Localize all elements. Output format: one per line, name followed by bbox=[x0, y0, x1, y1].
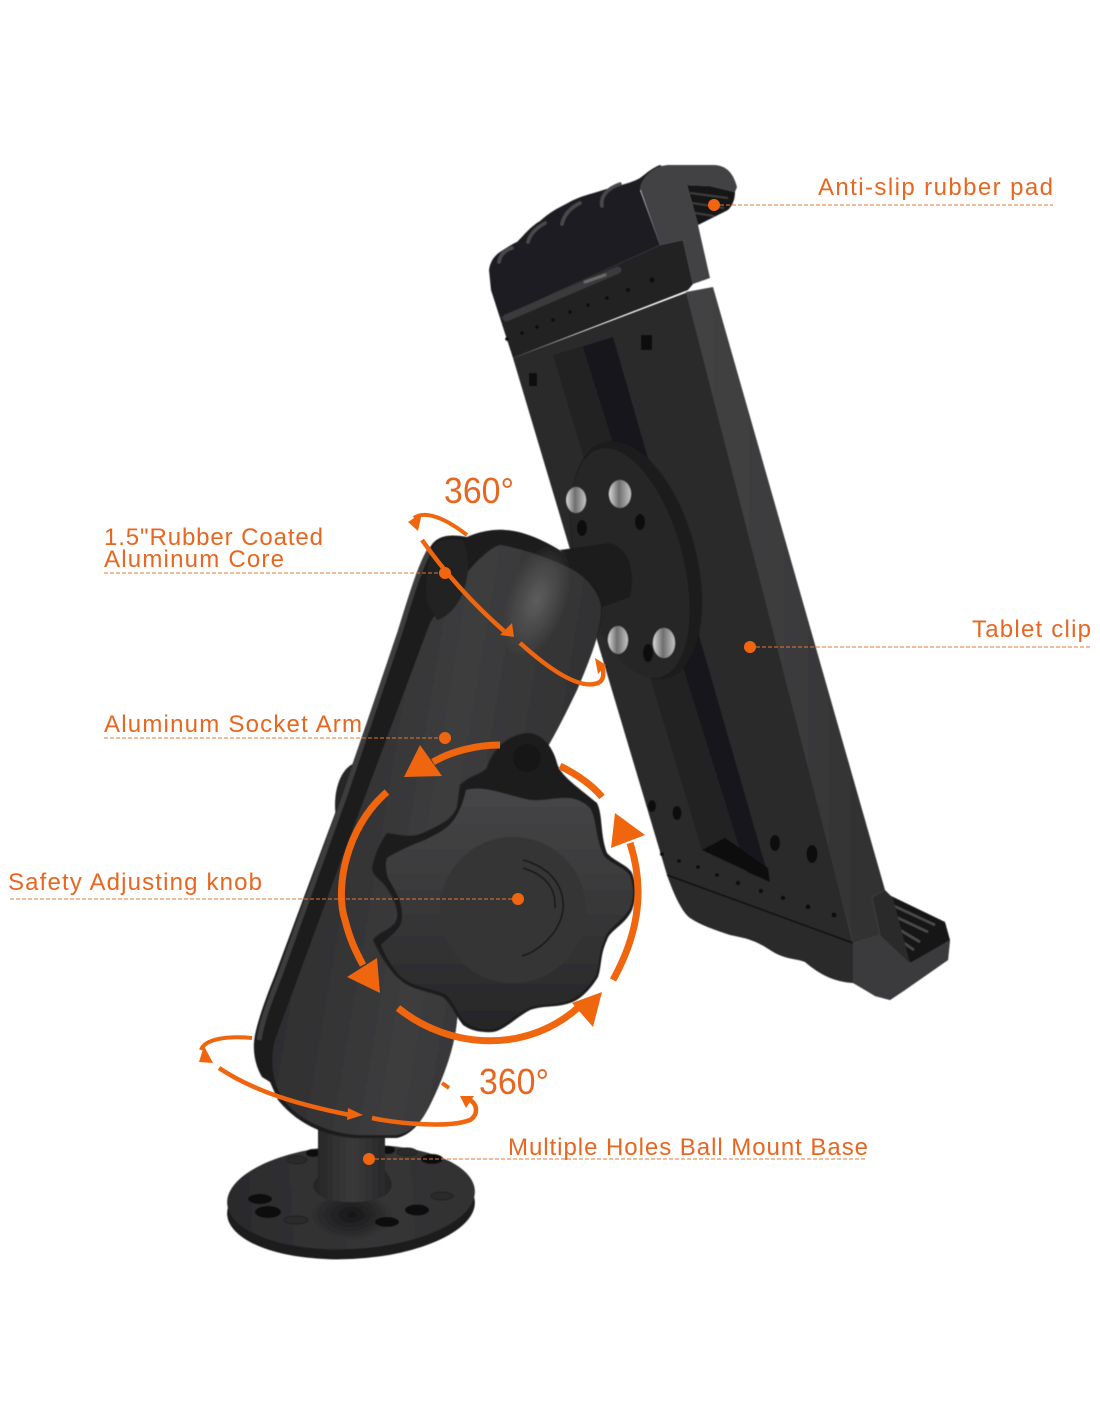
top socket bbox=[426, 539, 468, 620]
callout: multiple holes ball mount base: Multiple Holes Ball Mount Base bbox=[508, 1134, 868, 1161]
clip holes bbox=[529, 335, 836, 918]
callout: multiple holes ball mount base bbox=[363, 1134, 868, 1165]
back ball bbox=[335, 763, 381, 847]
post shadow bbox=[310, 1194, 394, 1246]
dotted strip bbox=[500, 240, 693, 358]
cap arrow mark bbox=[522, 860, 563, 956]
screws bbox=[566, 487, 586, 513]
callout: rubber coated aluminum core: Aluminum Core bbox=[104, 546, 284, 573]
tablet clip bbox=[489, 165, 950, 1000]
socket arm bbox=[254, 530, 602, 1138]
mounting plate bbox=[546, 427, 726, 693]
clip side rail bbox=[686, 287, 885, 943]
callout: aluminum socket arm: Aluminum Socket Arm bbox=[104, 711, 362, 738]
stem bbox=[560, 543, 632, 608]
safety adjusting knob bbox=[372, 733, 635, 1032]
clip front plate bbox=[513, 292, 853, 943]
knob face bbox=[381, 789, 633, 1029]
arm face bbox=[272, 545, 601, 1135]
flange highlight bbox=[259, 548, 431, 1040]
top rubber pad bbox=[687, 185, 735, 225]
grip ridges bbox=[499, 184, 620, 262]
base post bbox=[313, 1125, 392, 1202]
knob cap bbox=[440, 837, 586, 983]
callout: rubber coated aluminum core: 1.5"Rubber Coated bbox=[104, 524, 323, 551]
callout: anti-slip rubber pad bbox=[708, 174, 1053, 211]
callout: rubber coated aluminum core bbox=[104, 524, 451, 579]
base bbox=[224, 1125, 478, 1265]
callout: anti-slip rubber pad: Anti-slip rubber pad bbox=[818, 174, 1053, 201]
orange rotation arrow, top ball bbox=[408, 513, 606, 684]
top grip front bbox=[489, 165, 668, 318]
callout: aluminum socket arm bbox=[104, 711, 451, 744]
base holes bbox=[248, 1146, 443, 1227]
callout: safety adjusting knob bbox=[8, 869, 524, 905]
orange rotation arrow, bottom ball bbox=[199, 1037, 476, 1124]
top grip side bbox=[640, 165, 737, 284]
label: 360 degrees bottom: 360° bbox=[479, 1061, 549, 1102]
orange rotation arrows, knob bbox=[341, 745, 645, 1041]
clip channel bbox=[553, 337, 770, 882]
bottom grip bbox=[667, 875, 950, 1000]
bottom rubber pad bbox=[885, 893, 950, 965]
arm silhouette bbox=[254, 530, 602, 1138]
callout: tablet clip bbox=[744, 616, 1091, 653]
callout: tablet clip: Tablet clip bbox=[972, 616, 1091, 643]
callout: safety adjusting knob: Safety Adjusting knob bbox=[8, 869, 262, 896]
label: 360 degrees top: 360° bbox=[444, 470, 514, 511]
knob ear hole bbox=[513, 744, 541, 772]
